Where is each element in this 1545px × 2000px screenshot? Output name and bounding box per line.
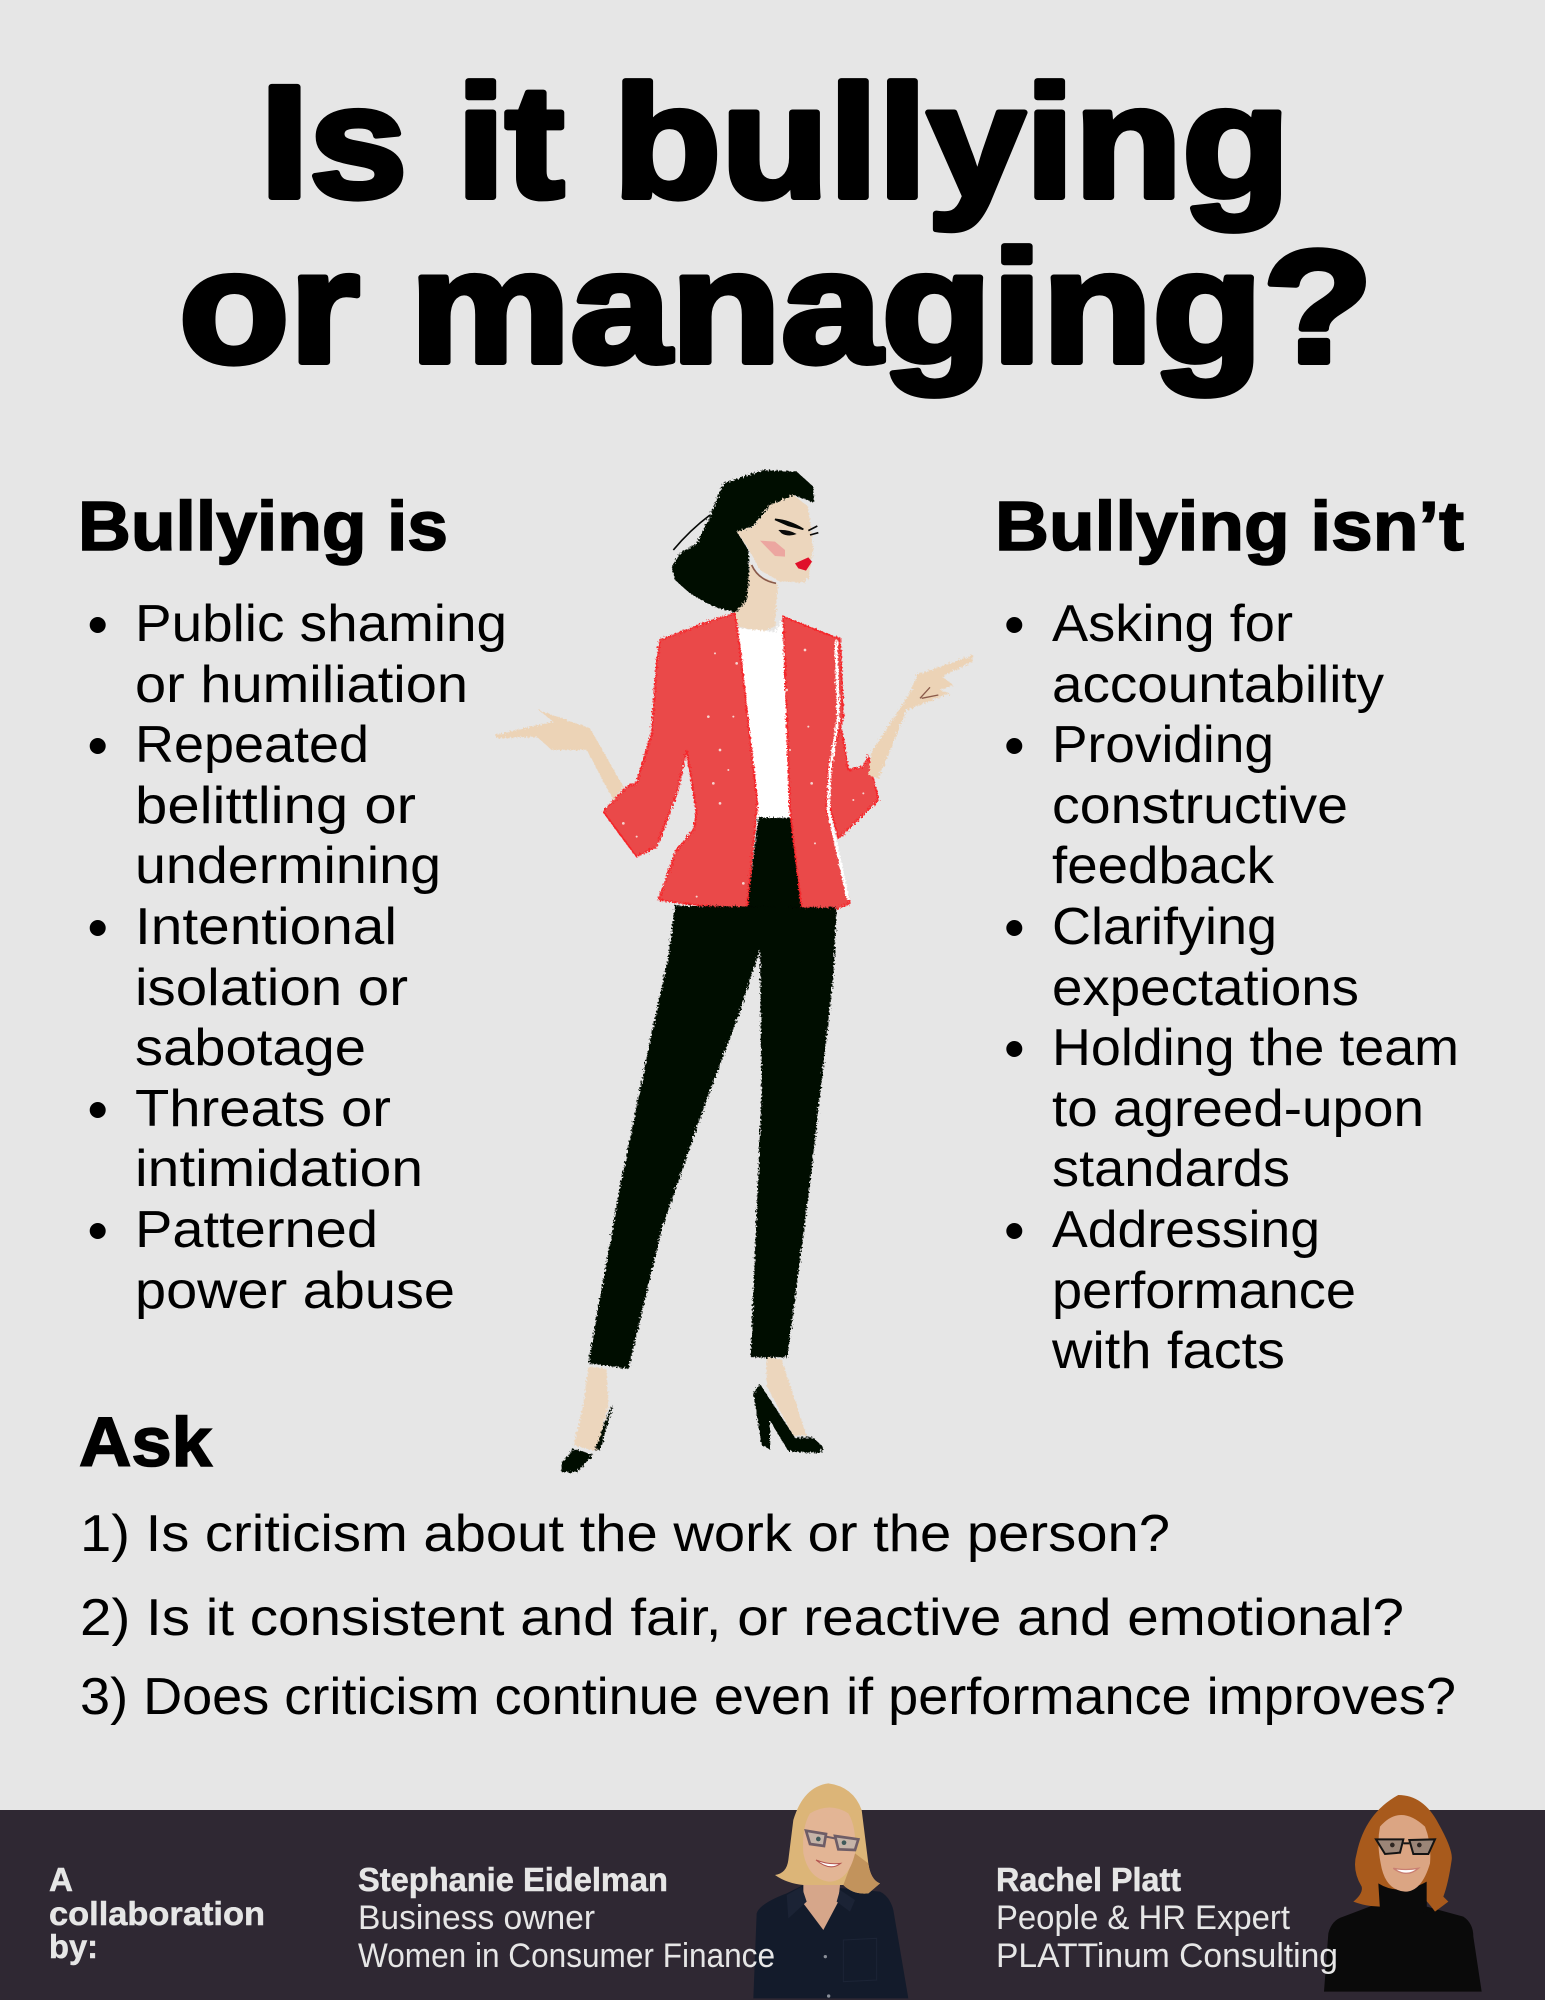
list: bullying behaviours — [90, 595, 507, 1320]
list: not bullying behaviours: performance — [1052, 1262, 1356, 1320]
text: Rachel Platt credit: People & HR Expert — [996, 1899, 1291, 1937]
list: not bullying behaviours: Holding the team — [1052, 1019, 1459, 1077]
list: bullying behaviours: Intentional — [135, 898, 397, 956]
footer: collaboration label — [49, 1861, 265, 1965]
list: bullying behaviours: Patterned — [135, 1201, 378, 1259]
panel: bullying is — [78, 487, 507, 1320]
list: bullying behaviours: isolation or — [135, 959, 408, 1017]
title: Is it bullying — [260, 52, 1290, 231]
list: not bullying behaviours: Clarifying — [1052, 898, 1277, 956]
title: or managing? — [179, 217, 1373, 396]
list: not bullying behaviours: with facts — [1051, 1322, 1285, 1380]
figure: legs and shoes — [562, 906, 837, 1472]
footer bar — [0, 1810, 1545, 2000]
list: not bullying behaviours: expectations — [1052, 959, 1359, 1017]
heading: ask: Ask — [79, 1403, 212, 1481]
question 2: 2) Is it consistent and fair, or reactive and emotional? — [80, 1589, 1404, 1647]
panel: ask questions — [79, 1403, 1456, 1726]
list: not bullying behaviours: feedback — [1052, 837, 1275, 895]
text: Rachel Platt credit — [996, 1861, 1338, 1975]
illustration: woman in red jacket pointing both ways — [495, 470, 973, 1472]
list: bullying behaviours: Public shaming — [135, 595, 507, 653]
list: bullying behaviours: Threats or — [135, 1080, 391, 1138]
heading: bullying isn't: Bullying isn’t — [995, 487, 1464, 565]
text: Stephanie Eidelman credit — [358, 1861, 775, 1975]
text: Rachel Platt credit: PLATTinum Consulting — [996, 1937, 1338, 1975]
title — [179, 52, 1373, 396]
list: bullying behaviours: intimidation — [135, 1140, 423, 1198]
list: not bullying behaviours: Addressing — [1052, 1201, 1320, 1259]
list: bullying behaviours: belittling or — [135, 777, 416, 835]
question 1: 1) Is criticism about the work or the person? — [80, 1505, 1170, 1563]
figure: upper body — [495, 470, 973, 912]
list: not bullying behaviours: accountability — [1052, 656, 1384, 714]
portrait: Rachel Platt — [1324, 1795, 1482, 1992]
list: not bullying behaviours — [1006, 595, 1459, 1380]
footer: collaboration label: collaboration — [49, 1895, 265, 1932]
panel: bullying isn't — [995, 487, 1464, 1380]
list: not bullying behaviours: standards — [1052, 1140, 1290, 1198]
list: bullying behaviours: sabotage — [135, 1019, 366, 1077]
heading: bullying is: Bullying is — [78, 487, 448, 565]
footer: collaboration label: A — [49, 1861, 73, 1898]
footer: collaboration label: by: — [49, 1928, 98, 1965]
question 3: 3) Does criticism continue even if performance improves? — [80, 1668, 1456, 1726]
list: bullying behaviours: or humiliation — [135, 656, 468, 714]
list: not bullying behaviours: to agreed-upon — [1052, 1080, 1424, 1138]
list: not bullying behaviours: Asking for — [1052, 595, 1293, 653]
list: not bullying behaviours: constructive — [1052, 777, 1348, 835]
text: Stephanie Eidelman credit: Business owner — [358, 1899, 595, 1937]
list: not bullying behaviours: Providing — [1052, 716, 1274, 774]
portrait: Stephanie Eidelman — [753, 1783, 908, 1998]
text: Stephanie Eidelman credit: Women in Consumer Finance — [358, 1937, 775, 1975]
text: Rachel Platt credit: Rachel Platt — [996, 1861, 1181, 1898]
text: Stephanie Eidelman credit: Stephanie Eidelman — [358, 1861, 668, 1898]
list: bullying behaviours: Repeated — [135, 716, 369, 774]
list: bullying behaviours: power abuse — [135, 1262, 455, 1320]
list: bullying behaviours: undermining — [135, 837, 441, 895]
